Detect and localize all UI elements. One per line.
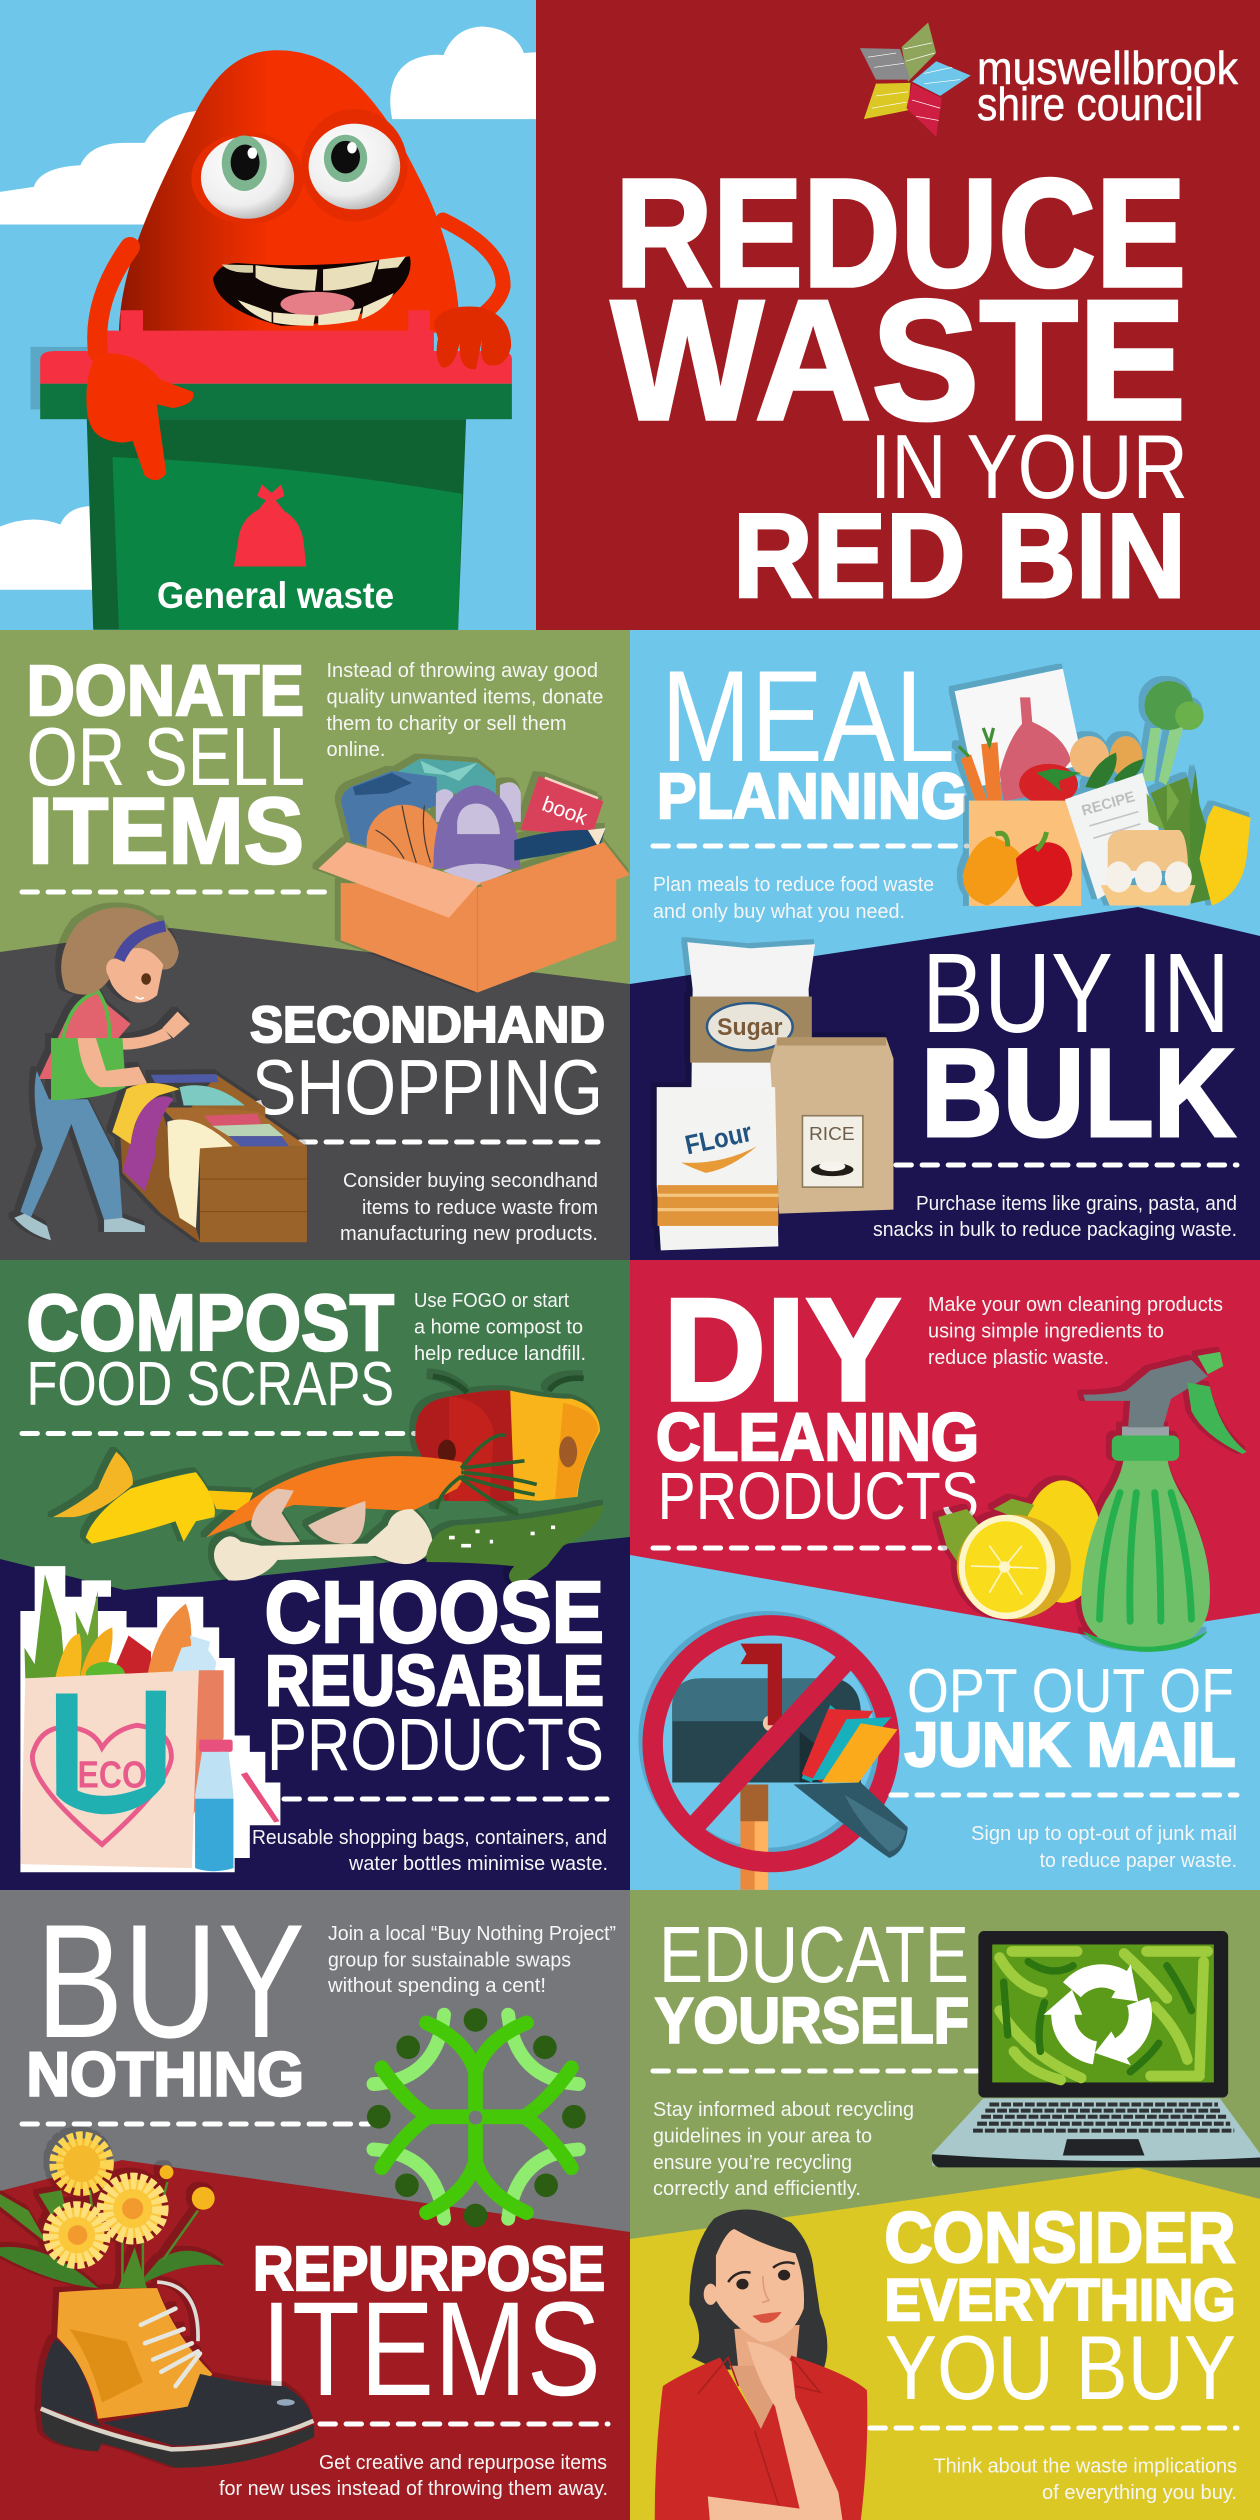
heading: compost food scraps: FOOD SCRAPS bbox=[26, 1350, 394, 1419]
heading: educate yourself: YOURSELF bbox=[655, 1984, 969, 2056]
illustration: laptop with recycling symbol bbox=[932, 1931, 1260, 2167]
illustration: sacks of sugar, rice and flour bbox=[657, 942, 893, 1250]
main heading: RED BIN bbox=[733, 489, 1186, 623]
text: educate description: correctly and efficiently. bbox=[653, 2177, 861, 2200]
text: secondhand description: items to reduce waste from bbox=[362, 1196, 598, 1219]
panel: title bbox=[536, 0, 1260, 630]
text: educate description bbox=[653, 2098, 914, 2200]
monster arms bbox=[97, 220, 503, 352]
illustration: thinking woman bbox=[655, 2209, 867, 2520]
text: diy description: reduce plastic waste. bbox=[928, 1346, 1109, 1369]
heading: meal planning: MEAL bbox=[661, 643, 955, 789]
heading: diy cleaning products: CLEANING bbox=[656, 1400, 979, 1475]
heading: opt out of junk mail bbox=[904, 1657, 1236, 1780]
panel: buy nothing / repurpose items bbox=[0, 1890, 630, 2520]
text: buy nothing description: without spending a cent! bbox=[327, 1974, 546, 1997]
icon: garbage bag bbox=[234, 484, 306, 567]
illustration: groceries and recipe: RECIPE bbox=[1080, 789, 1137, 820]
panel: donate or sell / secondhand shopping bbox=[0, 630, 630, 1260]
heading: consider everything you buy: CONSIDER bbox=[884, 2199, 1236, 2278]
text: reusable description bbox=[252, 1826, 608, 1875]
heading: choose reusable products: CHOOSE bbox=[264, 1564, 604, 1661]
illustration: box of donated items bbox=[318, 759, 630, 992]
heading: donate or sell items bbox=[26, 652, 305, 883]
council logo: shire council bbox=[977, 78, 1203, 130]
text: reusable description: Reusable shopping bags, containers, and bbox=[252, 1826, 607, 1849]
heading: meal planning: PLANNING bbox=[657, 760, 967, 832]
heading: consider everything you buy: EVERYTHING bbox=[884, 2268, 1236, 2333]
text: compost description: a home compost to bbox=[414, 1316, 583, 1338]
heading: buy nothing: NOTHING bbox=[26, 2040, 304, 2110]
main heading: WASTE bbox=[611, 265, 1186, 456]
text: secondhand description bbox=[340, 1169, 598, 1245]
icon: buy nothing emblem bbox=[367, 2008, 586, 2227]
main heading: IN YOUR bbox=[870, 417, 1188, 518]
bin label: General waste bbox=[157, 575, 394, 616]
text: donate description: them to charity or sell them bbox=[326, 712, 566, 735]
text: compost description: Use FOGO or start bbox=[414, 1289, 569, 1312]
heading: donate or sell items: OR SELL bbox=[26, 710, 305, 803]
text: consider description bbox=[934, 2455, 1237, 2504]
heading: repurpose items: REPURPOSE bbox=[253, 2235, 605, 2304]
bin bbox=[31, 310, 512, 630]
text: buy nothing description bbox=[327, 1922, 616, 1997]
heading: consider everything you buy bbox=[884, 2199, 1236, 2419]
heading: compost food scraps bbox=[26, 1278, 394, 1419]
main heading bbox=[611, 147, 1188, 623]
icon: recycling arrows bbox=[1040, 1964, 1165, 2073]
heading: secondhand shopping: SECONDHAND bbox=[250, 996, 605, 1053]
heading: repurpose items bbox=[253, 2235, 605, 2424]
clouds bbox=[0, 27, 536, 590]
text: donate description: quality unwanted items, donate bbox=[326, 686, 604, 708]
text: junk mail description: to reduce paper waste. bbox=[1040, 1849, 1237, 1872]
heading: donate or sell items: DONATE bbox=[26, 652, 304, 731]
text: junk mail description: Sign up to opt-out of junk mail bbox=[971, 1822, 1237, 1845]
heading: choose reusable products bbox=[264, 1564, 604, 1786]
text: donate description: online. bbox=[326, 738, 386, 761]
text: reusable description: water bottles minimise waste. bbox=[348, 1852, 608, 1875]
council logo bbox=[860, 22, 1239, 137]
heading: educate yourself bbox=[655, 1910, 969, 2056]
illustration: spray bottle and lemons bbox=[938, 1352, 1247, 1652]
illustration: sacks of sugar, rice and flour: FLour bbox=[682, 1117, 755, 1160]
illustration: boot with flowers bbox=[0, 2138, 314, 2468]
panel: meal planning / buy in bulk bbox=[630, 630, 1260, 1260]
text: secondhand description: manufacturing new products. bbox=[340, 1222, 598, 1245]
text: consider description: Think about the waste implications bbox=[934, 2455, 1237, 2478]
text: donate description: Instead of throwing away good bbox=[326, 659, 598, 682]
text: repurpose description: Get creative and repurpose items bbox=[319, 2451, 607, 2474]
text: buy in bulk description bbox=[873, 1192, 1237, 1241]
heading: buy in bulk: BULK bbox=[921, 1024, 1236, 1163]
text: compost description bbox=[414, 1289, 586, 1365]
heading: repurpose items: ITEMS bbox=[261, 2275, 601, 2424]
heading: donate or sell items: ITEMS bbox=[28, 778, 304, 883]
heading: choose reusable products: PRODUCTS bbox=[267, 1703, 604, 1786]
panel: compost food scraps / choose reusable products bbox=[0, 1260, 630, 1890]
heading: educate yourself: EDUCATE bbox=[659, 1910, 969, 1999]
text: meal planning description bbox=[653, 873, 934, 923]
text: buy in bulk description: snacks in bulk to reduce packaging waste. bbox=[873, 1218, 1237, 1241]
text: secondhand description: Consider buying secondhand bbox=[343, 1169, 598, 1192]
illustration: woman sorting clothes in crates bbox=[14, 908, 307, 1242]
text: buy nothing description: Join a local “Buy Nothing Project” bbox=[328, 1922, 616, 1945]
text: educate description: guidelines in your area to bbox=[653, 2124, 872, 2148]
illustration: reusable eco bag and bottle bbox=[20, 1566, 280, 1872]
heading: diy cleaning products bbox=[656, 1268, 979, 1534]
heading: secondhand shopping bbox=[250, 996, 605, 1131]
illustration: sacks of sugar, rice and flour: RICE bbox=[809, 1123, 855, 1144]
text: buy in bulk description: Purchase items like grains, pasta, and bbox=[916, 1192, 1237, 1215]
text: repurpose description bbox=[219, 2451, 608, 2500]
heading: compost food scraps: COMPOST bbox=[26, 1278, 394, 1367]
text: consider description: of everything you buy. bbox=[1042, 2481, 1237, 2504]
illustration: reusable eco bag and bottle: ECO bbox=[78, 1753, 147, 1795]
heading: buy nothing bbox=[26, 1891, 305, 2110]
illustration: box of donated items: book bbox=[539, 793, 591, 830]
text: compost description: help reduce landfill. bbox=[414, 1342, 586, 1365]
heading: buy nothing: BUY bbox=[36, 1891, 305, 2072]
heading: meal planning bbox=[657, 643, 967, 832]
mouth bbox=[213, 256, 411, 326]
heading: choose reusable products: REUSABLE bbox=[265, 1642, 604, 1721]
text: repurpose description: for new uses instead of throwing them away. bbox=[219, 2477, 608, 2500]
illustration: groceries and recipe bbox=[955, 669, 1251, 907]
illustration: no junk mail mailbox bbox=[649, 1621, 908, 1890]
heading: diy cleaning products: PRODUCTS bbox=[658, 1459, 979, 1534]
heading: diy cleaning products: DIY bbox=[663, 1268, 901, 1431]
illustration: food scraps bbox=[53, 1376, 604, 1587]
text: diy description: Make your own cleaning products bbox=[928, 1293, 1223, 1316]
text: educate description: Stay informed about recycling bbox=[653, 2098, 914, 2121]
text: educate description: ensure you’re recycling bbox=[653, 2151, 852, 2174]
text: diy description: using simple ingredients to bbox=[928, 1320, 1164, 1342]
illustration: sacks of sugar, rice and flour: Sugar bbox=[717, 1015, 782, 1041]
text: meal planning description: and only buy what you need. bbox=[653, 900, 905, 923]
text: buy nothing description: group for sustainable swaps bbox=[328, 1948, 571, 1972]
heading: secondhand shopping: SHOPPING bbox=[252, 1043, 603, 1131]
text: donate description bbox=[326, 659, 604, 761]
heading: buy in bulk bbox=[921, 930, 1236, 1163]
panel: educate yourself / consider everything bbox=[630, 1890, 1260, 2520]
panel: diy cleaning products / opt out of junk mail bbox=[630, 1260, 1260, 1890]
monster body bbox=[119, 50, 460, 333]
monster hands bbox=[86, 307, 511, 480]
heading: opt out of junk mail: JUNK MAIL bbox=[904, 1711, 1236, 1780]
text: diy description bbox=[928, 1293, 1223, 1369]
panel: hero illustration with monster and bin bbox=[0, 0, 536, 630]
council logo: muswellbrook bbox=[977, 42, 1239, 94]
text: junk mail description bbox=[971, 1822, 1237, 1872]
text: meal planning description: Plan meals to reduce food waste bbox=[653, 873, 934, 896]
main heading: REDUCE bbox=[615, 147, 1186, 319]
